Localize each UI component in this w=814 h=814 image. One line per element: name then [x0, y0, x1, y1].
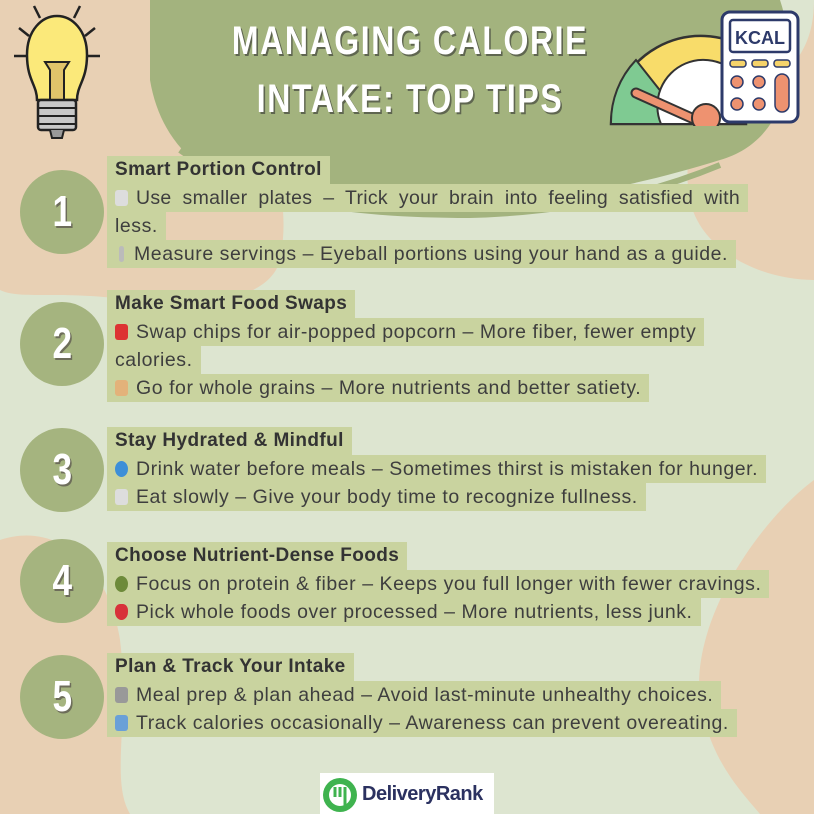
- text: Make Smart Food Swaps: [115, 293, 347, 314]
- text: Smart Portion Control: [115, 159, 322, 180]
- icon: calorie meter and calculator: [610, 10, 800, 126]
- text: 2: [52, 319, 72, 368]
- text: Go for whole grains – More nutrients and better satiety.: [136, 377, 641, 399]
- text: Track calories occasionally – Awareness can prevent overeating.: [136, 712, 729, 734]
- text: Pick whole foods over processed – More nutrients, less junk.: [136, 601, 692, 623]
- text: Use smaller plates – Trick your brain into feeling satisfied with: [136, 187, 740, 209]
- text: Swap chips for air-popped popcorn – More fiber, fewer empty: [136, 321, 696, 343]
- text: 5: [52, 672, 72, 721]
- text: Plan & Track Your Intake: [115, 656, 346, 677]
- tip 5: [20, 653, 737, 739]
- tip 1: [20, 156, 748, 268]
- text: Meal prep & plan ahead – Avoid last-minute unhealthy choices.: [136, 684, 713, 706]
- title: [232, 19, 588, 121]
- text: Measure servings – Eyeball portions using your hand as a guide.: [134, 243, 728, 265]
- text: 1: [52, 187, 72, 236]
- icon: light bulb: [14, 6, 100, 139]
- text: calories.: [115, 349, 193, 371]
- text: 3: [52, 445, 72, 494]
- text: Drink water before meals – Sometimes thirst is mistaken for hunger.: [136, 458, 758, 480]
- tip 3: [20, 427, 766, 512]
- tip 2: [20, 290, 704, 402]
- title: INTAKE: TOP TIPS: [257, 77, 563, 121]
- icon: calorie meter and calculator: KCAL: [735, 28, 785, 48]
- text: 4: [52, 556, 72, 605]
- logo: DeliveryRank: [320, 773, 494, 814]
- text: less.: [115, 215, 158, 237]
- title: MANAGING CALORIE: [232, 19, 588, 63]
- text: Eat slowly – Give your body time to recognize fullness.: [136, 486, 638, 508]
- text: Focus on protein & fiber – Keeps you full longer with fewer cravings.: [136, 573, 761, 595]
- text: Choose Nutrient-Dense Foods: [115, 545, 399, 566]
- text: Stay Hydrated & Mindful: [115, 430, 344, 451]
- tip 4: [20, 539, 769, 626]
- logo: DeliveryRank: DeliveryRank: [362, 783, 483, 805]
